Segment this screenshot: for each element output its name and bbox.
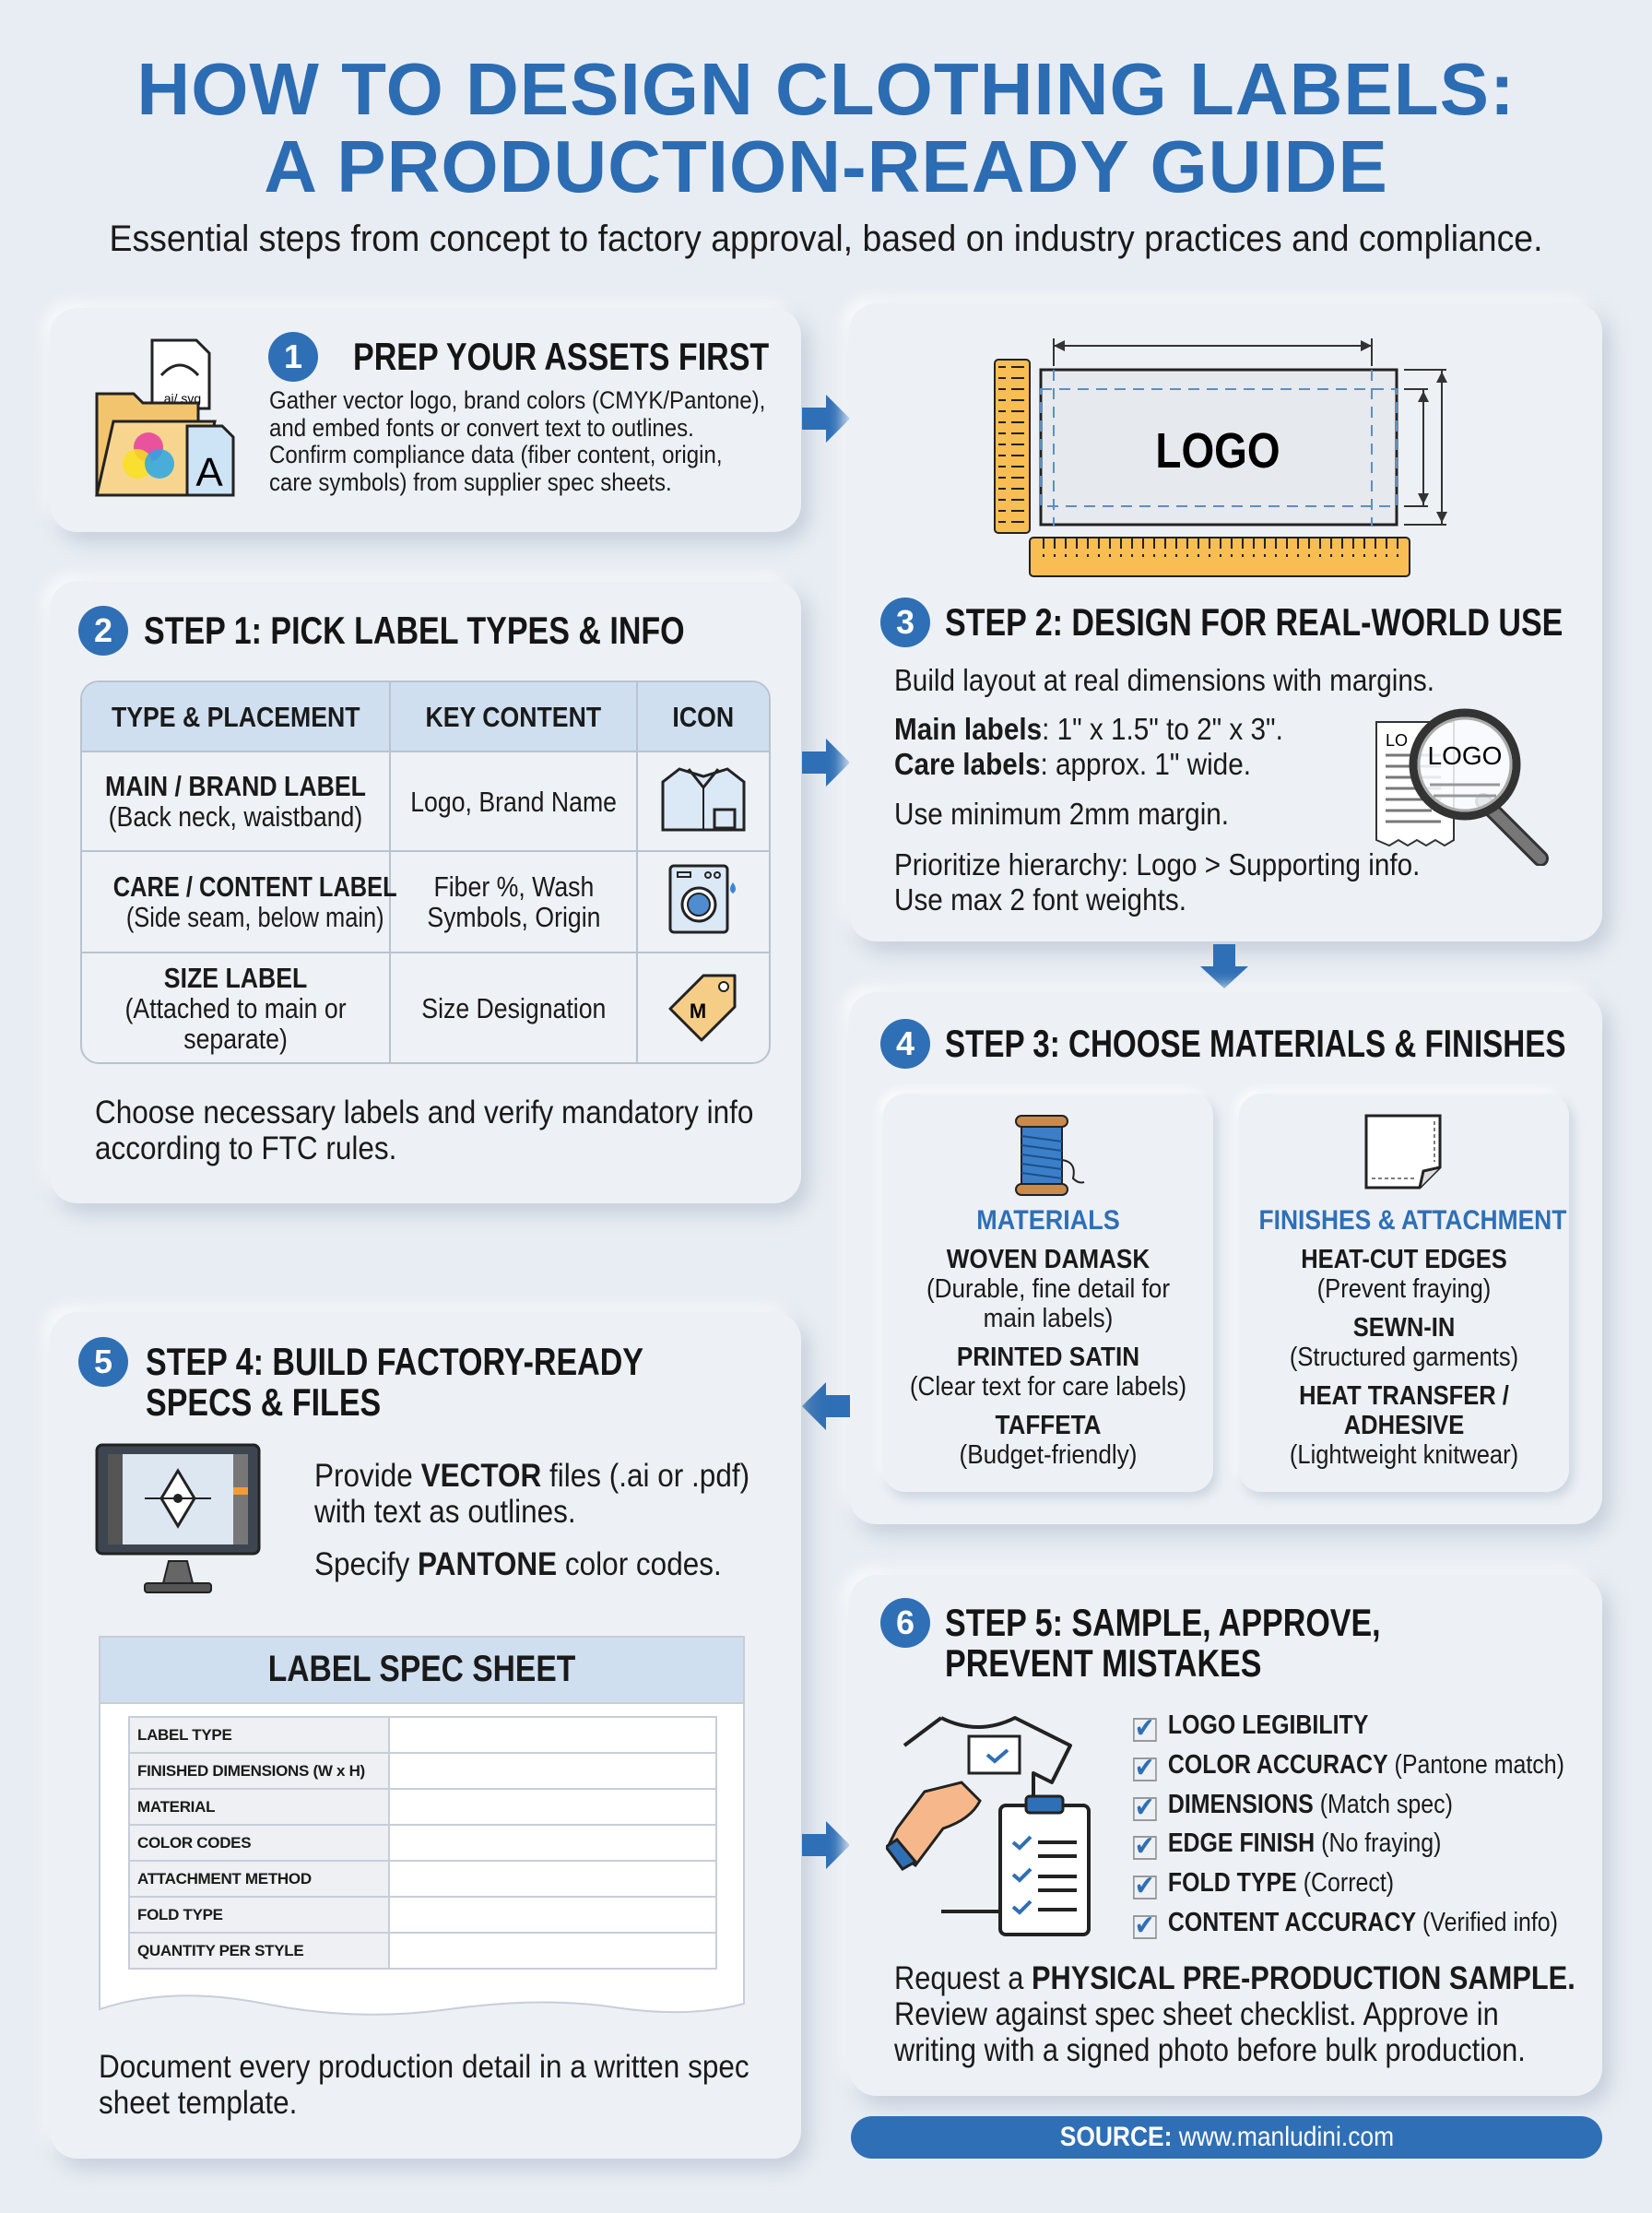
text: finishes list: (Structured garments) (1290, 1343, 1518, 1372)
text: hierarchy: Prioritize hierarchy: Logo > Supporting info. (894, 847, 1420, 882)
text: materials list: (Budget-friendly) (960, 1440, 1137, 1470)
text: Gather vector logo, brand colors (CMYK/Pantone), (269, 386, 765, 414)
icon: magnifier: LO (1386, 731, 1408, 750)
checklist: ✔ (1135, 1713, 1154, 1744)
checklist (1133, 1710, 1564, 1941)
table: spec fields: ATTACHMENT METHOD (137, 1870, 312, 1887)
table: label types: Fiber %, Wash (433, 870, 594, 903)
heading (146, 1340, 643, 1424)
text: hierarchy: Use max 2 font weights. (894, 882, 1186, 917)
title: A PRODUCTION-READY GUIDE (264, 125, 1388, 207)
icon: tag M (668, 974, 736, 1042)
text: materials list: main labels) (984, 1304, 1113, 1333)
table: label types: (Back neck, waistband) (109, 800, 362, 833)
heading: PREP YOUR ASSETS FIRST (353, 335, 769, 378)
checklist: EDGE FINISH (No fraying) (1168, 1828, 1441, 1858)
text: document: sheet template. (99, 2085, 297, 2121)
badge 6 (880, 1598, 930, 1648)
heading: STEP 5: SAMPLE, APPROVE, (945, 1601, 1381, 1644)
table: label types: (Attached to main or (124, 992, 347, 1024)
text: finishes list: HEAT-CUT EDGES (1301, 1245, 1507, 1274)
icon: folder (95, 339, 234, 496)
text: Build layout at real dimensions with margins. (894, 663, 1434, 697)
heading: PREVENT MISTAKES (945, 1641, 1261, 1685)
heading: STEP 2: DESIGN FOR REAL-WORLD USE (945, 600, 1563, 644)
text: materials list: PRINTED SATIN (957, 1343, 1139, 1372)
checklist: COLOR ACCURACY (Pantone match) (1168, 1750, 1564, 1780)
table: spec fields: FOLD TYPE (137, 1905, 223, 1923)
text: finishes list (1258, 1205, 1567, 1470)
checklist: DIMENSIONS (Match spec) (1168, 1790, 1453, 1819)
arrow: right 1 (802, 395, 849, 443)
table: label types: (Side seam, below main) (126, 901, 384, 933)
heading (945, 1601, 1381, 1685)
badge 2: 2 (94, 611, 112, 649)
icon: shirt (662, 767, 745, 832)
checklist: ✔ (1135, 1911, 1154, 1941)
spec sheet (99, 1636, 745, 2016)
diagram: label with rulers: LOGO (1155, 423, 1280, 479)
text: vector files: Provide VECTOR files (.ai or .pdf) (314, 1458, 749, 1494)
table: label types: Logo, Brand Name (410, 786, 617, 817)
card: finishes (1239, 1094, 1569, 1492)
badge 4: 4 (896, 1024, 914, 1062)
text: sizes: Main labels: 1" x 1.5" to 2" x 3". (894, 712, 1283, 746)
table: spec fields: LABEL TYPE (137, 1726, 231, 1743)
panel: step 2 design (849, 303, 1602, 941)
checklist: ✔ (1135, 1753, 1154, 1783)
table: label types: separate) (183, 1022, 288, 1055)
heading: spec sheet: LABEL SPEC SHEET (268, 1649, 575, 1689)
checklist: FOLD TYPE (Correct) (1168, 1868, 1394, 1898)
card: materials (883, 1094, 1213, 1492)
table: label types: SIZE LABEL (164, 961, 307, 994)
source bar (851, 2116, 1602, 2159)
badge 2 (78, 606, 128, 656)
text: finishes list: (Lightweight knitwear) (1290, 1440, 1518, 1470)
table: label types: Size Designation (421, 992, 606, 1024)
badge 3 (880, 598, 930, 647)
title (136, 48, 1516, 207)
panel: step 3 materials (849, 992, 1602, 1524)
checklist: ✔ (1135, 1831, 1154, 1862)
title: HOW TO DESIGN CLOTHING LABELS: (136, 48, 1516, 130)
icon: monitor (96, 1444, 260, 1593)
badge 4 (880, 1019, 930, 1069)
table: spec fields (128, 1716, 717, 1970)
text: document (99, 2049, 749, 2121)
table: label types: ICON (673, 701, 734, 732)
table: spec fields: FINISHED DIMENSIONS (W x H) (137, 1761, 365, 1780)
source bar: SOURCE: www.manludini.com (1059, 2122, 1394, 2152)
text: materials list: (Clear text for care labels) (910, 1372, 1186, 1402)
text: finishes list: HEAT TRANSFER / (1299, 1381, 1509, 1411)
icon: tag M: M (690, 1000, 706, 1023)
table: label types: MAIN / BRAND LABEL (105, 770, 366, 802)
text: sample request: Review against spec sheet checklist. Approve in (894, 1996, 1499, 2032)
text: sample request (894, 1960, 1575, 2068)
heading: STEP 3: CHOOSE MATERIALS & FINISHES (945, 1022, 1566, 1065)
text: materials list: WOVEN DAMASK (947, 1245, 1150, 1274)
heading: STEP 1: PICK LABEL TYPES & INFO (144, 609, 685, 652)
text: margin: Use minimum 2mm margin. (894, 797, 1229, 831)
text (95, 1095, 753, 1166)
table: label types (80, 680, 771, 1064)
badge 1 (268, 332, 318, 382)
panel: prep assets (50, 308, 801, 532)
checklist: ✔ (1135, 1793, 1154, 1823)
illustration: shirt hand clipboard (886, 1716, 1091, 1936)
badge 3: 3 (896, 603, 914, 641)
arrow: right 2 (802, 739, 849, 787)
text: vector files (314, 1458, 749, 1530)
heading: SPECS & FILES (146, 1380, 381, 1424)
checklist: CONTENT ACCURACY (Verified info) (1168, 1908, 1558, 1937)
icon: magnifier (1375, 708, 1549, 866)
text: Choose necessary labels and verify mandatory info (95, 1095, 753, 1130)
badge 6: 6 (896, 1604, 914, 1641)
panel: step 5 sample (849, 1575, 1602, 2096)
icon: magnifier: LOGO (1428, 741, 1502, 770)
text: according to FTC rules. (95, 1130, 396, 1166)
text: sizes: Care labels: approx. 1" wide. (894, 747, 1251, 781)
text: care symbols) from supplier spec sheets. (269, 468, 672, 496)
arrow: left (802, 1382, 850, 1430)
text: finishes list: SEWN-IN (1353, 1313, 1455, 1343)
text: and embed fonts or convert text to outlines. (269, 413, 694, 441)
text: Confirm compliance data (fiber content, origin, (269, 441, 723, 468)
text: sample request: writing with a signed photo before bulk production. (894, 2032, 1526, 2068)
text: hierarchy (894, 847, 1420, 917)
text: pantone: Specify PANTONE color codes. (314, 1546, 722, 1582)
badge 1: 1 (284, 337, 302, 375)
table: spec fields: QUANTITY PER STYLE (137, 1942, 303, 1959)
text: materials list: TAFFETA (995, 1411, 1102, 1440)
subtitle: Essential steps from concept to factory approval, based on industry practices and compliance. (110, 219, 1542, 259)
table: spec fields: MATERIAL (137, 1798, 215, 1815)
text: finishes list: (Prevent fraying) (1317, 1274, 1491, 1304)
text: document: Document every production detail in a written spec (99, 2049, 749, 2085)
checklist: ✔ (1135, 1871, 1154, 1901)
icon: spool (1015, 1115, 1084, 1196)
icon: label corner (1364, 1114, 1442, 1189)
arrow: right 3 (802, 1821, 849, 1869)
text (269, 386, 765, 496)
table: label types: KEY CONTENT (426, 701, 601, 732)
text: sizes (894, 712, 1283, 781)
icon: folder: .ai/.svg (160, 391, 201, 406)
panel: step 1 (50, 581, 801, 1203)
icon: washing machine (669, 865, 736, 933)
checklist: LOGO LEGIBILITY (1168, 1710, 1368, 1740)
text: materials list: MATERIALS (976, 1205, 1120, 1236)
arrow: down (1200, 944, 1248, 988)
table: label types: TYPE & PLACEMENT (112, 701, 360, 732)
panel: step 4 specs (50, 1312, 801, 2159)
text: finishes list: ADHESIVE (1344, 1411, 1464, 1440)
table: label types: CARE / CONTENT LABEL (113, 870, 397, 903)
badge 5: 5 (94, 1343, 112, 1380)
text: finishes list: FINISHES & ATTACHMENT (1258, 1205, 1566, 1236)
text: materials list: (Durable, fine detail for (926, 1274, 1170, 1304)
text: vector files: with text as outlines. (314, 1494, 576, 1530)
table: spec fields: COLOR CODES (137, 1833, 251, 1852)
text: sample request: Request a PHYSICAL PRE-PRODUCTION SAMPLE. (894, 1960, 1575, 1996)
text: materials list (910, 1205, 1186, 1470)
diagram: label with rulers (994, 338, 1447, 577)
table: label types: Symbols, Origin (427, 901, 600, 933)
badge 5 (78, 1337, 128, 1387)
icon: folder: A (195, 450, 223, 495)
heading: STEP 4: BUILD FACTORY-READY (146, 1340, 643, 1383)
